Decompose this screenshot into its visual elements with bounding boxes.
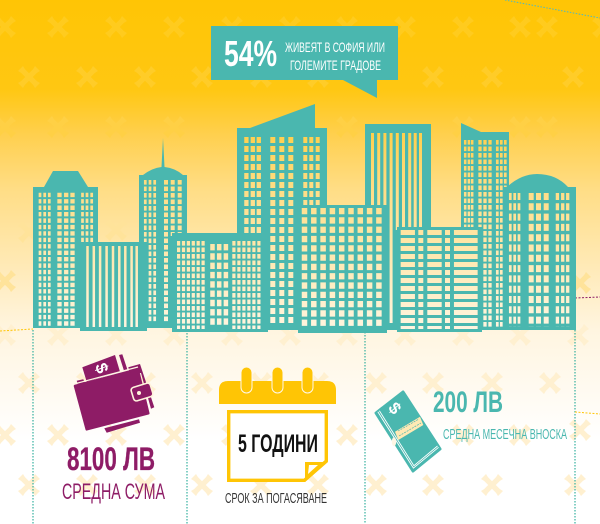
icon: stack of money (376, 392, 440, 471)
building: slanted back tower (461, 123, 509, 330)
city skyline (33, 104, 576, 333)
building: sloped roof tower (237, 104, 327, 330)
building: front grid block (298, 205, 387, 333)
icon: calendar (219, 367, 336, 482)
value: 5 years: 5 ГОДИНИ (238, 430, 318, 458)
building: front mid block (172, 233, 268, 332)
value: 8100 lv: 8100 ЛВ (67, 441, 155, 477)
building: spire tower (139, 138, 187, 328)
callout: 54% live in cities (211, 26, 398, 98)
stat: average amount (62, 354, 165, 504)
building: dome tower right (503, 174, 576, 330)
value: 200 lv: 200 ЛВ (433, 386, 503, 419)
building: tall striped tower (365, 124, 431, 330)
icon: wallet (74, 354, 154, 433)
label: repayment term: СРОК ЗА ПОГАСЯВАНЕ (225, 490, 327, 507)
building: horizontal window block (397, 227, 482, 332)
stat: repayment term (219, 367, 336, 507)
building: left tower (33, 171, 98, 328)
building: striped low block (80, 242, 147, 331)
icon: stack of money: $ (384, 399, 405, 418)
icon: wallet: $ (91, 360, 112, 376)
callout: 54% live in cities: 54% (224, 33, 277, 74)
callout: 54% live in cities: ЖИВЕЯТ В СОФИЯ ИЛИ (285, 39, 385, 55)
callout: 54% live in cities: ГОЛЕМИТЕ ГРАДОВЕ (290, 57, 381, 73)
label: average amount: СРЕДНА СУМА (62, 479, 165, 504)
stat: monthly payment (376, 386, 567, 471)
